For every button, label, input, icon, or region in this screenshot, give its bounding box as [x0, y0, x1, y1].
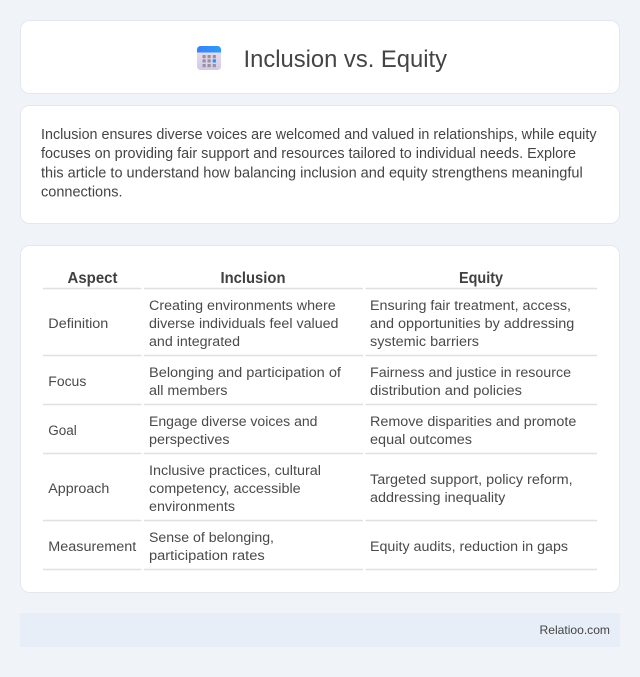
table row: definition: systemic barriers	[370, 334, 479, 350]
table row: definition	[48, 298, 574, 350]
table row: goal: Goal	[48, 423, 77, 439]
footer	[20, 613, 620, 647]
table row: goal: Remove disparities and promote	[370, 414, 576, 430]
panel: comparison table	[20, 246, 620, 592]
text block: introduction: Inclusion ensures diverse voices are welcomed and valued in relationships, while equity	[41, 127, 597, 143]
table row: measurement: participation rates	[149, 548, 265, 564]
table row: definition: and integrated	[149, 334, 240, 350]
table row: definition: Ensuring fair treatment, access,	[370, 298, 571, 314]
table row: measurement: Measurement	[48, 539, 136, 555]
table row: goal: equal outcomes	[370, 432, 472, 448]
footer text: source: Relatioo.com	[540, 623, 610, 637]
table row: definition: Creating environments where	[149, 298, 336, 314]
table row: definition: and opportunities by addressing	[370, 316, 574, 332]
table row: measurement	[48, 530, 568, 564]
table header row: Equity	[459, 270, 503, 287]
title: Inclusion vs. Equity	[244, 46, 447, 73]
table row: approach: Targeted support, policy reform,	[370, 472, 573, 488]
icon: calendar	[197, 46, 221, 70]
text block: introduction: focuses on providing fair support and resources tailored to individual needs. Explore	[41, 146, 576, 162]
table row: measurement: Sense of belonging,	[149, 530, 274, 546]
table row: goal: perspectives	[149, 432, 230, 448]
table row: focus: Fairness and justice in resource	[370, 365, 571, 381]
table row: approach: environments	[149, 499, 235, 515]
table row: measurement: Equity audits, reduction in gaps	[370, 539, 568, 555]
table row: focus: distribution and policies	[370, 383, 522, 399]
table row: approach: addressing inequality	[370, 490, 506, 506]
table row: approach: Approach	[48, 481, 109, 497]
table row: approach	[48, 463, 573, 515]
text block: introduction	[41, 127, 597, 201]
table header row: Aspect	[68, 270, 118, 287]
table row: goal	[48, 414, 576, 448]
panel: introduction	[20, 106, 620, 224]
table row: focus: Focus	[48, 374, 86, 390]
table row: focus: all members	[149, 383, 228, 399]
table row: focus	[48, 365, 571, 399]
table header row: Inclusion	[220, 270, 286, 287]
table row: approach: competency, accessible	[149, 481, 301, 497]
text block: introduction: this article to understand how balancing inclusion and equity strengthens meaningful	[41, 166, 583, 182]
table header row	[68, 270, 503, 287]
text block: introduction: connections.	[41, 185, 122, 201]
table row: definition: diverse individuals feel valued	[149, 316, 338, 332]
panel: header	[20, 20, 620, 94]
table row: approach: Inclusive practices, cultural	[149, 463, 321, 479]
table row: definition: Definition	[48, 316, 108, 332]
table row: goal: Engage diverse voices and	[149, 414, 318, 430]
table row: focus: Belonging and participation of	[149, 365, 341, 381]
